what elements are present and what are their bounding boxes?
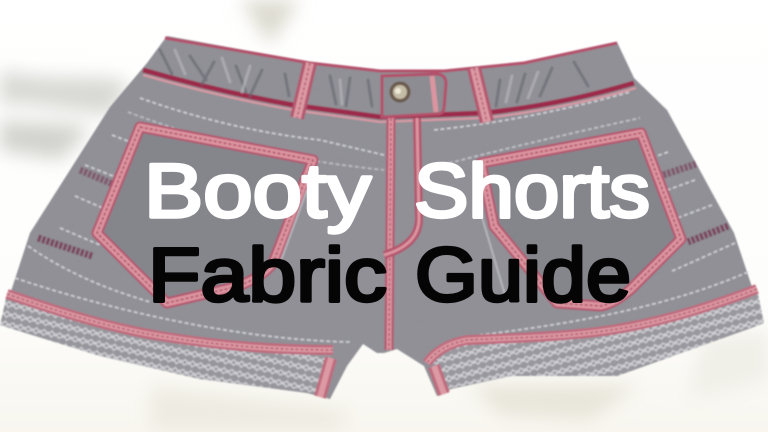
title line 2: black — [148, 233, 631, 318]
belt loops — [297, 63, 487, 122]
title line 2: black: Fabric — [148, 233, 387, 318]
leg hems — [7, 289, 757, 397]
waistband — [143, 38, 636, 122]
fly placket — [384, 118, 419, 350]
title line 1: white: Shorts — [414, 149, 650, 234]
right pocket — [481, 133, 681, 306]
waist tab — [382, 74, 446, 117]
left pocket — [97, 127, 313, 303]
hem lace panels — [0, 289, 764, 394]
metal button — [390, 82, 410, 102]
title line 2: black: Guide — [415, 233, 631, 318]
pocket inner seams — [280, 190, 505, 295]
title line 1: white — [144, 149, 650, 234]
title line 1: white: Booty — [144, 149, 371, 234]
title — [144, 149, 650, 318]
side seams and stitching — [15, 92, 748, 342]
